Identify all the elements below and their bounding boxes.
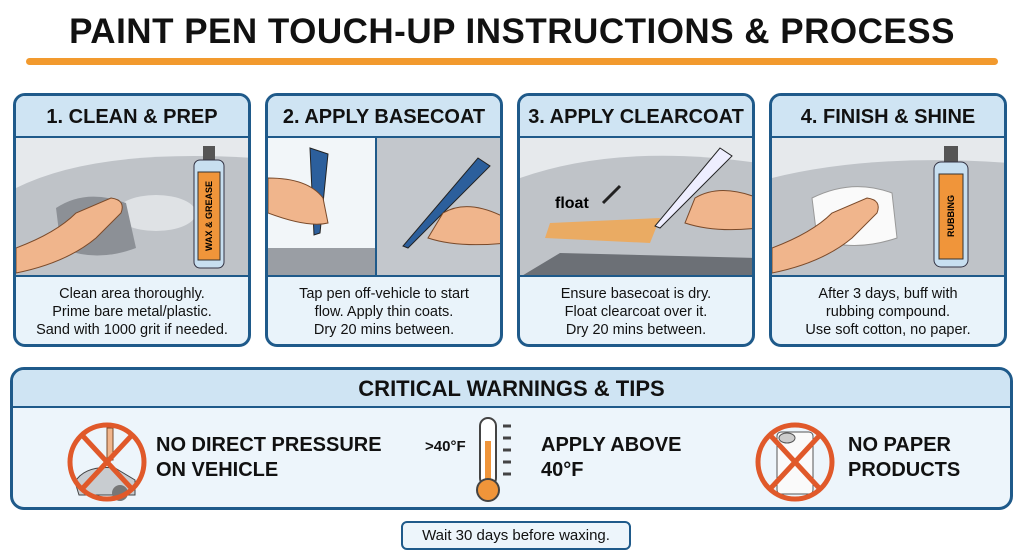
text 4	[805, 286, 971, 338]
text 1: Sand with 1000 grit if needed.	[36, 322, 228, 338]
panel: clearcoat	[517, 93, 755, 347]
text 2: Dry 20 mins between.	[314, 322, 454, 338]
text 4: After 3 days, buff with	[818, 286, 958, 302]
text 3	[561, 286, 711, 338]
footer note: Wait 30 days before waxing.	[422, 527, 610, 544]
panel: clean & prep	[13, 93, 251, 347]
text 1: Clean area thoroughly.	[59, 286, 205, 302]
heading 1: 1. CLEAN & PREP	[46, 106, 218, 128]
heading 3: 3. APPLY CLEARCOAT	[528, 106, 744, 128]
heading 2: 2. APPLY BASECOAT	[283, 106, 485, 128]
text 4: Use soft cotton, no paper.	[805, 322, 971, 338]
icon: no pressure	[68, 422, 146, 502]
text 3: Dry 20 mins between.	[566, 322, 706, 338]
warning text 3	[848, 434, 960, 481]
illustration: pens	[268, 138, 500, 277]
title: PAINT PEN TOUCH-UP INSTRUCTIONS & PROCESS	[69, 12, 955, 51]
illustration: buffing with compound: RUBBING	[946, 195, 956, 237]
warning text 1	[156, 434, 382, 481]
text 2: flow. Apply thin coats.	[315, 304, 453, 320]
illustration: hand cleaning with bottle	[16, 138, 248, 277]
panel: warnings	[10, 367, 1013, 510]
heading 1	[16, 96, 248, 138]
icon: thermometer	[425, 417, 511, 502]
panel: basecoat	[265, 93, 503, 347]
illustration: buffing with compound	[772, 138, 1004, 277]
warning text 2: 40°F	[541, 459, 583, 481]
text 4: rubbing compound.	[826, 304, 950, 320]
warning text 1: NO DIRECT PRESSURE	[156, 434, 382, 456]
footer note	[401, 521, 631, 550]
heading 4: 4. FINISH & SHINE	[801, 106, 975, 128]
heading 3	[520, 96, 752, 138]
warning text 2	[541, 434, 681, 481]
panel: finish	[769, 93, 1007, 347]
heading 4	[772, 96, 1004, 138]
illustration: hand cleaning with bottle: WAX & GREASE	[204, 181, 214, 251]
text 2: Tap pen off-vehicle to start	[299, 286, 469, 302]
warnings heading: CRITICAL WARNINGS & TIPS	[358, 376, 665, 401]
icon: thermometer: >40°F	[425, 438, 466, 455]
warning text 2: APPLY ABOVE	[541, 434, 681, 456]
warning text 1: ON VEHICLE	[156, 459, 278, 481]
illustration: clearcoat float: float	[555, 195, 589, 212]
text 1: Prime bare metal/plastic.	[52, 304, 212, 320]
warning text 3: PRODUCTS	[848, 459, 960, 481]
illustration: clearcoat float	[520, 138, 752, 277]
text 2	[299, 286, 469, 338]
warning text 3: NO PAPER	[848, 434, 951, 456]
icon: no paper	[756, 422, 834, 502]
text 3: Ensure basecoat is dry.	[561, 286, 711, 302]
text 1	[36, 286, 228, 338]
orange rule	[26, 58, 998, 65]
heading 2	[268, 96, 500, 138]
warnings heading	[13, 370, 1010, 408]
text 3: Float clearcoat over it.	[565, 304, 707, 320]
